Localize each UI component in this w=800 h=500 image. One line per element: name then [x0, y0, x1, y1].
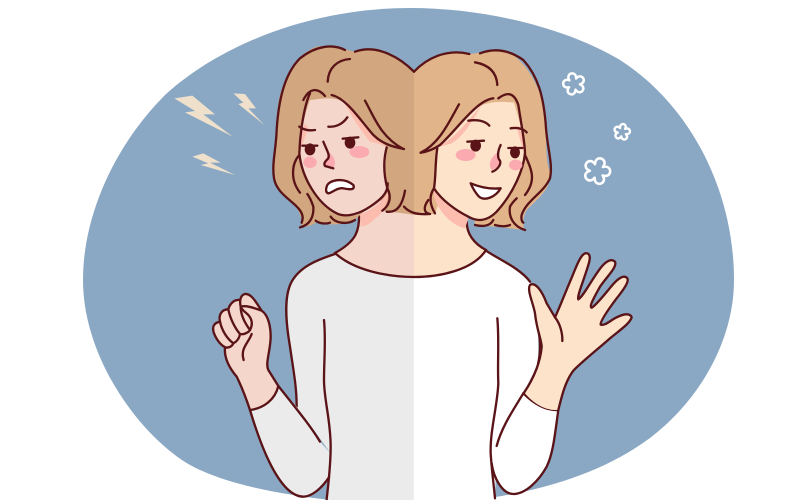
left hair [273, 46, 414, 227]
left face shadows [299, 98, 388, 227]
left torso [286, 253, 413, 500]
flower 3 [581, 154, 613, 186]
right face [434, 102, 525, 219]
left face [299, 98, 387, 216]
brows [468, 120, 489, 126]
bolt 2 [233, 93, 264, 125]
nose [490, 152, 501, 170]
blush [456, 149, 476, 161]
waving hand [525, 253, 632, 410]
mouth [326, 180, 354, 193]
left body: grey shirt and fist [213, 253, 413, 500]
angry face features [299, 117, 369, 193]
right hair strokes [414, 50, 551, 230]
heads [273, 46, 551, 277]
right hair [414, 51, 550, 230]
flower 1 [561, 71, 587, 96]
flower 2 [613, 123, 631, 140]
eyes [470, 140, 481, 152]
happy face features [456, 120, 527, 199]
left sleeve [250, 385, 331, 497]
mouth [471, 183, 501, 199]
right torso [413, 251, 538, 500]
flowers [561, 71, 631, 186]
brows [299, 127, 315, 130]
bolt 1 [174, 96, 233, 137]
nose [325, 152, 335, 168]
lightning bolts [174, 93, 264, 175]
right sleeve [492, 393, 558, 494]
blush [349, 146, 369, 158]
left neck [335, 190, 414, 277]
left neckline [335, 253, 414, 277]
bolt 3 [192, 153, 235, 175]
right neck [414, 190, 486, 277]
right neckline [414, 250, 486, 277]
fist [213, 294, 278, 410]
left hair strokes [273, 46, 430, 227]
right face shadows [434, 105, 525, 228]
right body: white shirt and waving hand [413, 251, 632, 500]
eyes [305, 143, 315, 155]
